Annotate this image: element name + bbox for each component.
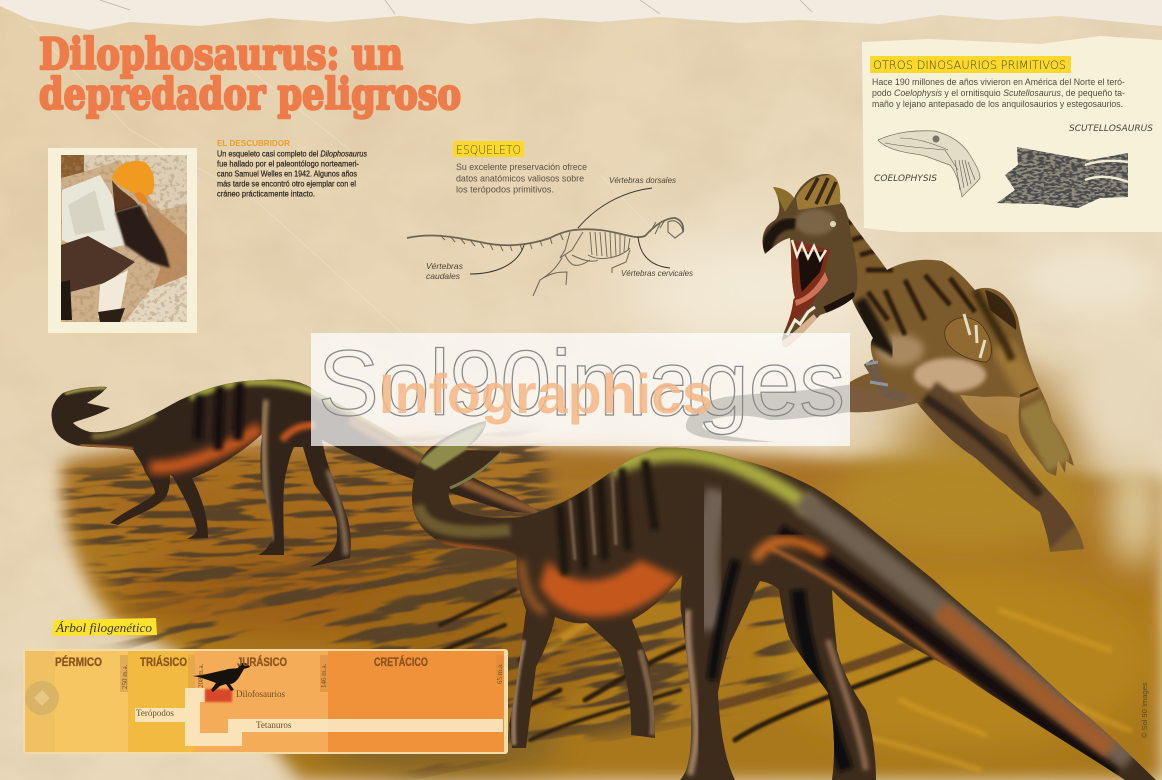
- text block: esqueleto: datos anatómicos valiosos sobre: [456, 174, 584, 184]
- period labels: PÉRMICO: [55, 654, 102, 669]
- running dinosaur head: [762, 174, 858, 348]
- sketch label: COELOPHYSIS: [874, 174, 938, 184]
- photo card: paleontologist: [48, 148, 197, 333]
- illustration: running Dilophosaurus with crest: [686, 170, 1090, 560]
- chart: skeleton with labels: [407, 175, 694, 296]
- foreground dinosaur orange belly: [540, 560, 680, 617]
- paragraph: Un esqueleto casi completo del Dilophosaurus: [217, 150, 367, 158]
- running dinosaur tail tip: [686, 384, 852, 442]
- foreground dinosaur green back highlight: [610, 454, 812, 510]
- chest shadow: [860, 300, 885, 345]
- label caudal: Vértebras: [426, 261, 464, 271]
- date labels: 65 m.a.: [496, 663, 504, 684]
- panel text: podo Coelophysis y el ornitisquio Scutellosaurus, de pequeño ta-: [872, 88, 1125, 98]
- period labels: [55, 654, 428, 669]
- foreground dinosaur leg shading: [688, 610, 696, 775]
- dinosaur silhouette: [193, 663, 250, 692]
- period labels: TRIÁSICO: [140, 654, 187, 669]
- seal: [25, 681, 59, 715]
- branch labels: Dilofosaurios: [236, 689, 285, 699]
- thigh: [1002, 345, 1032, 395]
- leader lines: [470, 188, 670, 274]
- watermark panel: [311, 331, 850, 446]
- running dinosaur arms and claws: [866, 314, 991, 398]
- stripes: [845, 215, 975, 335]
- title: Dilophosaurus: un: [39, 30, 403, 80]
- skeleton drawing: [407, 218, 683, 296]
- watermark: Sol90images: Sol90images: [318, 331, 845, 435]
- phylogenetic tree heading: Árbol filogenético: [55, 621, 152, 635]
- running dinosaur body: [848, 216, 1084, 552]
- paragraph: [217, 150, 367, 198]
- foreground dinosaur tail colouring: [800, 500, 1130, 760]
- title: depredador peligroso: [39, 70, 461, 120]
- foreground dinosaur neck and head colouring: [418, 505, 510, 532]
- period labels: CRETÁCICO: [374, 654, 428, 669]
- period: Jurásico: [195, 651, 328, 752]
- label cervical: Vértebras cervicales: [621, 268, 694, 278]
- text block: esqueleto: [456, 162, 587, 194]
- panel: esqueleto heading: ESQUELETO: [456, 143, 521, 157]
- desert sand background: [62, 340, 1162, 780]
- panel text: maño y lejano antepasado de los anquilosaurios y estegosaurios.: [872, 99, 1123, 109]
- subheading: EL DESCUBRIDOR: [217, 138, 290, 148]
- text block: El descubridor: [217, 138, 367, 198]
- label caudal: caudales: [426, 271, 461, 281]
- paragraph: cráneo prácticamente intacto.: [217, 190, 315, 198]
- coelophysis sketch: [878, 131, 980, 197]
- text block: esqueleto: los terópodos primitivos.: [456, 184, 554, 194]
- hump: [985, 290, 1016, 330]
- label caudal: [426, 261, 464, 281]
- period: Cretácico: [328, 651, 504, 752]
- torn paper top edge: [0, 0, 1162, 30]
- period: Pérmico: [25, 651, 128, 752]
- dilofosaurios range marker: [205, 689, 232, 702]
- panel text: Hace 190 millones de años vivieron en América del Norte el teró-: [872, 77, 1125, 87]
- illustration: rear Dilophosaurus: [52, 380, 539, 567]
- date labels: 146 m.a.: [320, 663, 328, 688]
- phylogenetic tree heading: [52, 618, 157, 636]
- panel: otros dinosaurios primitivos: [862, 36, 1162, 232]
- branch labels: Terópodos: [136, 708, 174, 718]
- fossil being dug: [115, 205, 170, 268]
- explorer hard hat: [112, 161, 154, 195]
- watermark: Infographics: Infographics: [379, 362, 713, 425]
- chart: phylogenetic timeline: [23, 649, 508, 754]
- period labels: JURÁSICO: [237, 654, 287, 669]
- sketch label: SCUTELLOSAURUS: [1069, 124, 1154, 134]
- branch labels: [136, 689, 292, 730]
- illustration: foreground Dilophosaurus: [400, 410, 1162, 780]
- title: [39, 30, 461, 120]
- credit: © Sol 90 Images: [1140, 682, 1149, 738]
- text block: esqueleto: Su excelente preservación ofrece: [456, 162, 587, 172]
- tree branches: [135, 688, 503, 746]
- panel text: [872, 77, 1125, 109]
- explorer shirt: [62, 175, 125, 252]
- period: Triásico: [128, 651, 195, 752]
- paragraph: más tarde se encontró otro ejemplar con el: [217, 180, 356, 188]
- sand ripples: [67, 436, 1130, 770]
- paragraph: cano Samuel Welles en 1942. Algunos años: [217, 170, 357, 178]
- date labels: 208 m.a.: [197, 663, 205, 688]
- panel heading: OTROS DINOSAURIOS PRIMITIVOS: [873, 58, 1066, 72]
- date labels: [121, 663, 504, 689]
- branch labels: Tetanuros: [256, 720, 292, 730]
- belly: [914, 358, 986, 392]
- label dorsal: Vértebras dorsales: [609, 175, 677, 185]
- date labels: 250 m.a.: [121, 664, 129, 689]
- photo: [61, 155, 187, 322]
- explorer trousers: [61, 236, 135, 320]
- paragraph: fue hallado por el paleontólogo norteameri-: [217, 160, 359, 168]
- scutellosaurus sketch: [997, 147, 1128, 208]
- lower leg: [925, 398, 1065, 535]
